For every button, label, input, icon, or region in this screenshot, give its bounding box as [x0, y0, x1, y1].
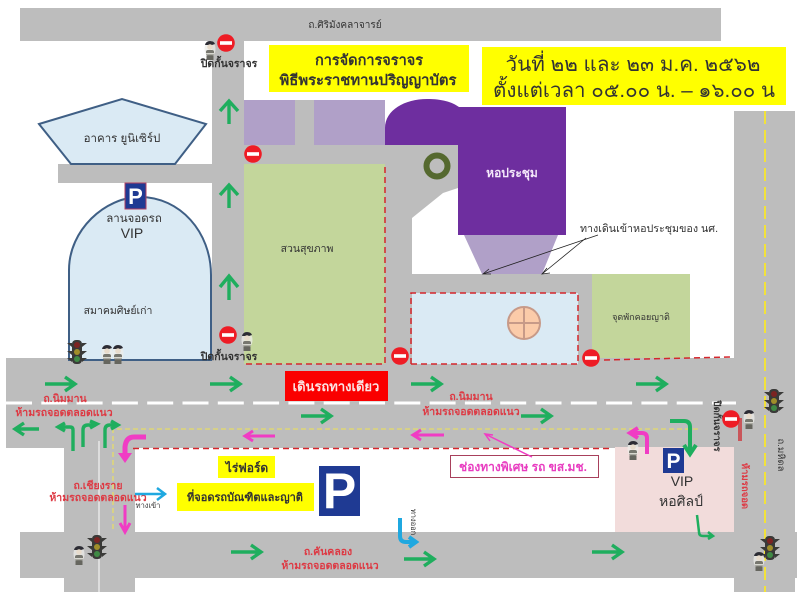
parking sign: VIP dome: P [128, 184, 143, 209]
no entry signs [217, 34, 740, 428]
one way sign: เดินรถทางเดียว [293, 379, 379, 394]
road label: Nimman centre [422, 391, 520, 418]
road label: Chiang Rai: ห้ามรถจอดตลอดแนว [49, 491, 147, 504]
green arrow: north 2 [220, 185, 238, 208]
blue arrow: exit [400, 518, 416, 547]
road label: Nimman centre: ถ.นิมมาน [449, 391, 494, 403]
green arrow: Nimman 2 [210, 377, 240, 391]
health park [244, 164, 385, 364]
road label: Nimman west: ห้ามรถจอดตลอดแนว [15, 406, 113, 419]
green arrow: north 3 [220, 276, 238, 300]
green arrow: westbound [15, 423, 39, 435]
title box: พิธีพระราชทานปริญญาบัตร [280, 72, 457, 89]
green arrow: turn right 2 [105, 421, 118, 448]
date and time box: ตั้งแต่เวลา ๐๕.๐๐ น. – ๑๖.๐๐ น [493, 76, 775, 102]
roundabout ring [426, 156, 448, 176]
road label: Nimman centre: ห้ามรถจอดตลอดแนว [422, 405, 520, 418]
VIP art museum: VIP [671, 473, 693, 489]
road label: Ton Khlong: ถ.คันคลอง [304, 546, 352, 558]
light purple buildings [244, 100, 385, 145]
VIP art museum [615, 447, 734, 532]
building: pentagon [39, 99, 206, 164]
relatives waiting area [592, 274, 690, 358]
parking sign: VIP art museum: P [666, 450, 681, 473]
pink arrow: lane west 1 [245, 431, 275, 441]
Rai Ford label: ไร่ฟอร์ด [224, 460, 268, 475]
green arrow: Nimman 3 [301, 409, 331, 423]
green arrow: turn left [58, 423, 73, 451]
VIP parking dome: VIP [121, 225, 143, 241]
title box [269, 45, 469, 92]
health park: สวนสุขภาพ [281, 243, 333, 255]
traffic police figures [74, 41, 764, 571]
walkway pointer arrows [483, 235, 598, 274]
traffic lights [67, 340, 784, 560]
road closed label north: ปิดกั้นจราจร [199, 55, 258, 70]
road label: Ton Khlong: ห้ามรถจอดตลอดแนว [281, 559, 379, 572]
green arrow: Nimman 4 [411, 377, 441, 391]
parking sign: VIP art museum [663, 448, 684, 473]
road closed label south: ปิดกั้นจราจร [199, 348, 258, 363]
special lane callout: ช่องทางพิเศษ รถ ขส.มช. [459, 460, 587, 474]
pink arrow: callout pointer [485, 434, 532, 457]
graduate parking label [177, 483, 314, 511]
entrance label: ทางเข้า [136, 501, 160, 510]
green arrow: north 1 [220, 101, 238, 124]
auditorium: หอประชุม [486, 166, 538, 181]
red dashed boundaries [133, 167, 730, 448]
pink arrow: lane west 2 [413, 430, 444, 440]
date and time box: วันที่ ๒๒ และ ๒๓ ม.ค. ๒๕๖๒ [506, 50, 760, 76]
exit label: ทางออก [409, 509, 418, 535]
road label: Mahidol: ถ.มหิดล [775, 439, 786, 472]
green arrow: Ton Khlong 2 [404, 552, 434, 566]
VIP parking dome: สมาคมศิษย์เก่า [84, 304, 152, 317]
road markings [6, 111, 765, 592]
road label: Ton Khlong [281, 546, 379, 572]
pink arrow: VIP lane [630, 428, 647, 454]
one way sign [285, 371, 388, 401]
walkway label: ทางเดินเข้าหอประชุมของ นศ. [580, 223, 718, 235]
plaza [412, 293, 578, 364]
road label: Nimman west [15, 393, 113, 419]
green arrow: VIP exit [697, 515, 713, 539]
title box: การจัดการจราจร [315, 53, 423, 69]
relatives waiting area: จุดพักคอยญาติ [612, 312, 670, 323]
parking sign: VIP dome [125, 183, 146, 209]
road label: Sirimangkalajarn: ถ.ศิริมังคลาจารย์ [308, 19, 382, 31]
green arrow: Ton Khlong 3 [592, 545, 622, 559]
blue arrow: entrance [135, 488, 165, 500]
green arrow: Nimman 1 [45, 377, 75, 391]
road label: Nimman west: ถ.นิมมาน [43, 393, 88, 405]
no entry sign pole [738, 418, 742, 441]
VIP art museum: หอศิลป์ [659, 493, 703, 509]
green arrow: turn right 1 [83, 421, 97, 447]
green arrow: into VIP [670, 421, 696, 454]
graduate parking label: ที่จอดรถบัณฑิตและญาติ [187, 489, 303, 504]
auditorium [385, 99, 566, 235]
VIP parking dome [69, 197, 211, 360]
VIP parking dome: ลานจอดรถ [106, 213, 162, 225]
building: pentagon: อาคาร ยูนิเซิร์ป [84, 131, 160, 145]
pink arrow: Chiang Rai south [120, 505, 130, 532]
green arrow: Nimman 5 [521, 409, 551, 423]
road closed label east: ปิดกั้นจราจร [711, 400, 725, 452]
green arrow: Ton Khlong 1 [231, 545, 261, 559]
large parking sign: P [323, 463, 356, 519]
road label: Chiang Rai: ถ.เชียงราย [74, 479, 122, 492]
walkway trapezoid [464, 235, 558, 274]
special lane callout [450, 456, 598, 478]
no parking label east: ห้ามรถจอด [739, 463, 751, 509]
green arrow: Nimman 6 [636, 377, 666, 391]
date and time box [482, 47, 786, 105]
pink arrow: large corner [118, 437, 146, 463]
Rai Ford label [218, 456, 275, 478]
road label: Chiang Rai [49, 479, 147, 504]
